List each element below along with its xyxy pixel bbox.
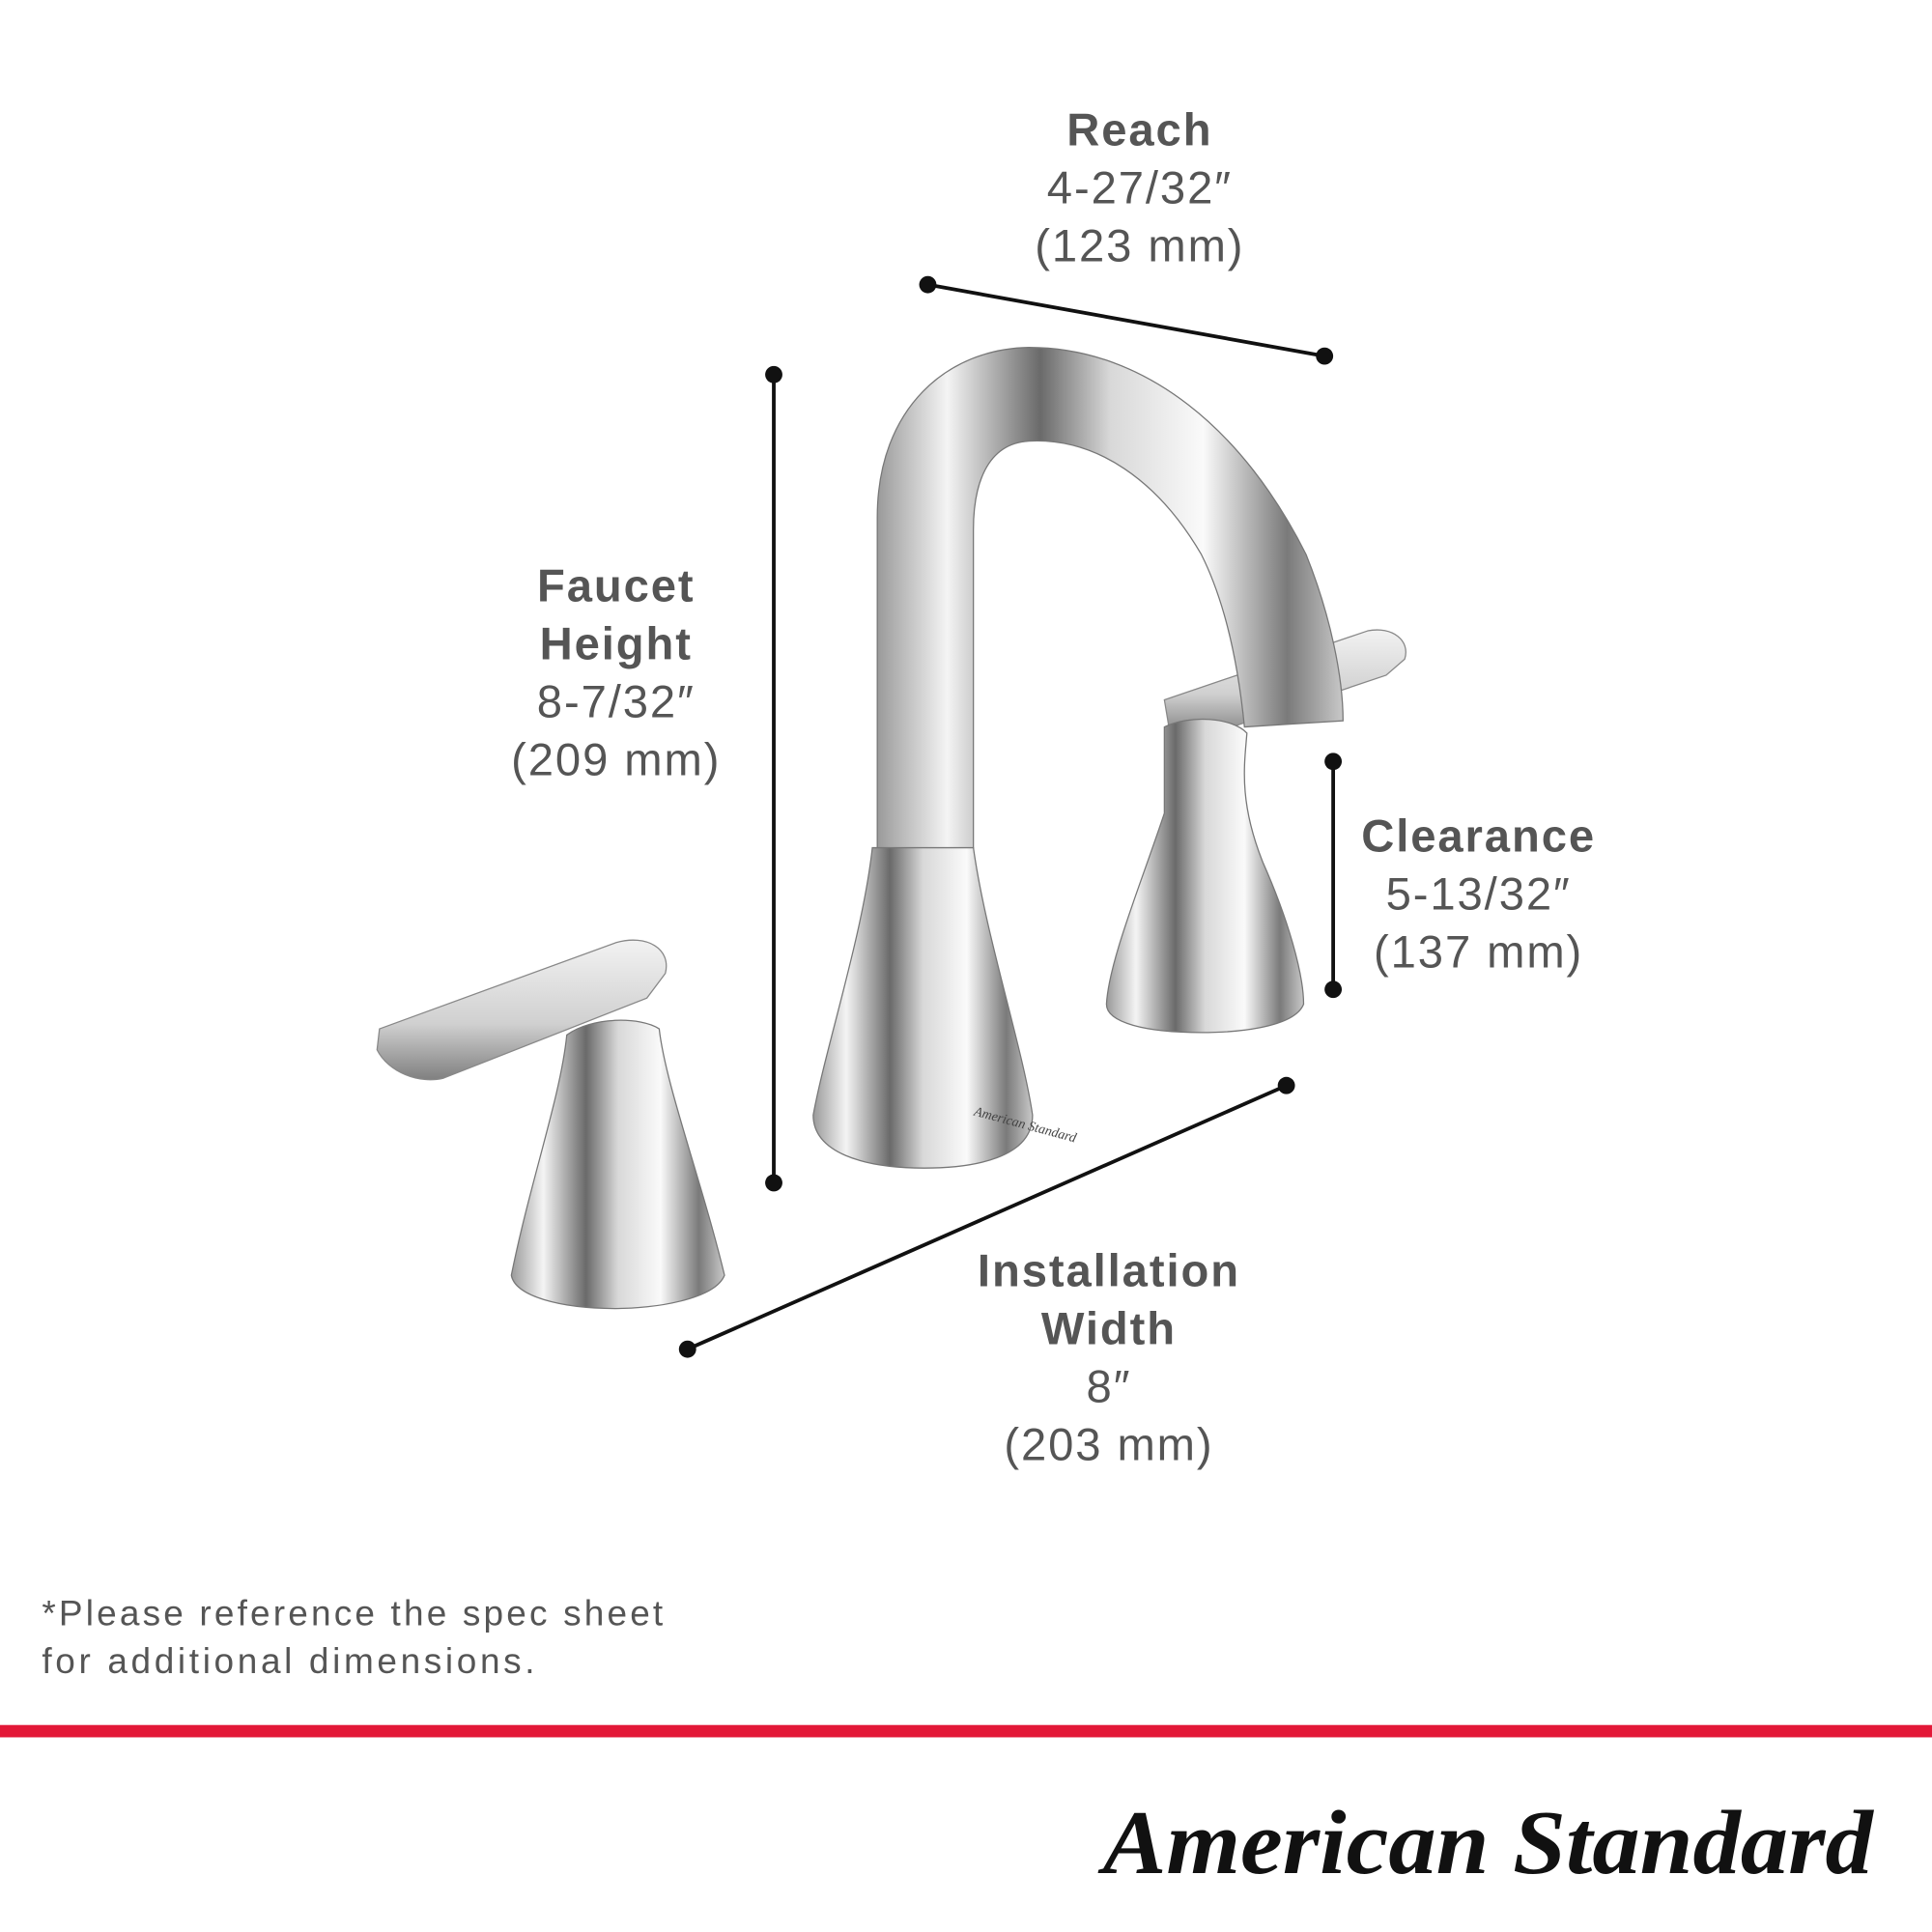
spout arc [877,348,1343,863]
right handle lever [1164,630,1406,737]
spout base cone [813,848,1033,1168]
reach label: Reach [1066,105,1212,156]
reach label: 4-27/32″ [1047,162,1233,213]
red divider bar [0,1725,1932,1737]
installation width label: Width [1041,1304,1177,1355]
footnote: for additional dimensions. [42,1641,535,1681]
installation width label: Installation [978,1246,1240,1297]
installation width label [978,1246,1240,1470]
footnote [42,1593,663,1681]
faucet height dimension line [765,366,782,1191]
faucet height label [511,560,721,785]
left handle cone [511,1020,724,1309]
clearance label: Clearance [1361,810,1596,862]
reach label [1035,105,1244,271]
faucet height label: (209 mm) [511,734,721,785]
installation width dimension line [679,1077,1295,1358]
clearance dimension line [1324,753,1342,998]
logo: American Standard: American Standard [1097,1793,1875,1893]
right handle cone [1106,719,1303,1033]
faucet height label: Height [540,618,693,669]
brand mark on base: American Standard [972,1103,1079,1147]
left handle lever [377,940,667,1080]
installation width label: (203 mm) [1004,1419,1214,1470]
faucet height label: Faucet [537,560,696,611]
clearance label: 5-13/32″ [1386,868,1572,920]
faucet illustration [377,348,1406,1309]
reach label: (123 mm) [1035,220,1244,271]
faucet height label: 8-7/32″ [537,676,696,727]
reach dimension line [920,276,1333,365]
footnote: *Please reference the spec sheet [42,1593,663,1633]
clearance label [1361,810,1596,978]
installation width label: 8″ [1087,1362,1131,1413]
clearance label: (137 mm) [1374,926,1583,978]
